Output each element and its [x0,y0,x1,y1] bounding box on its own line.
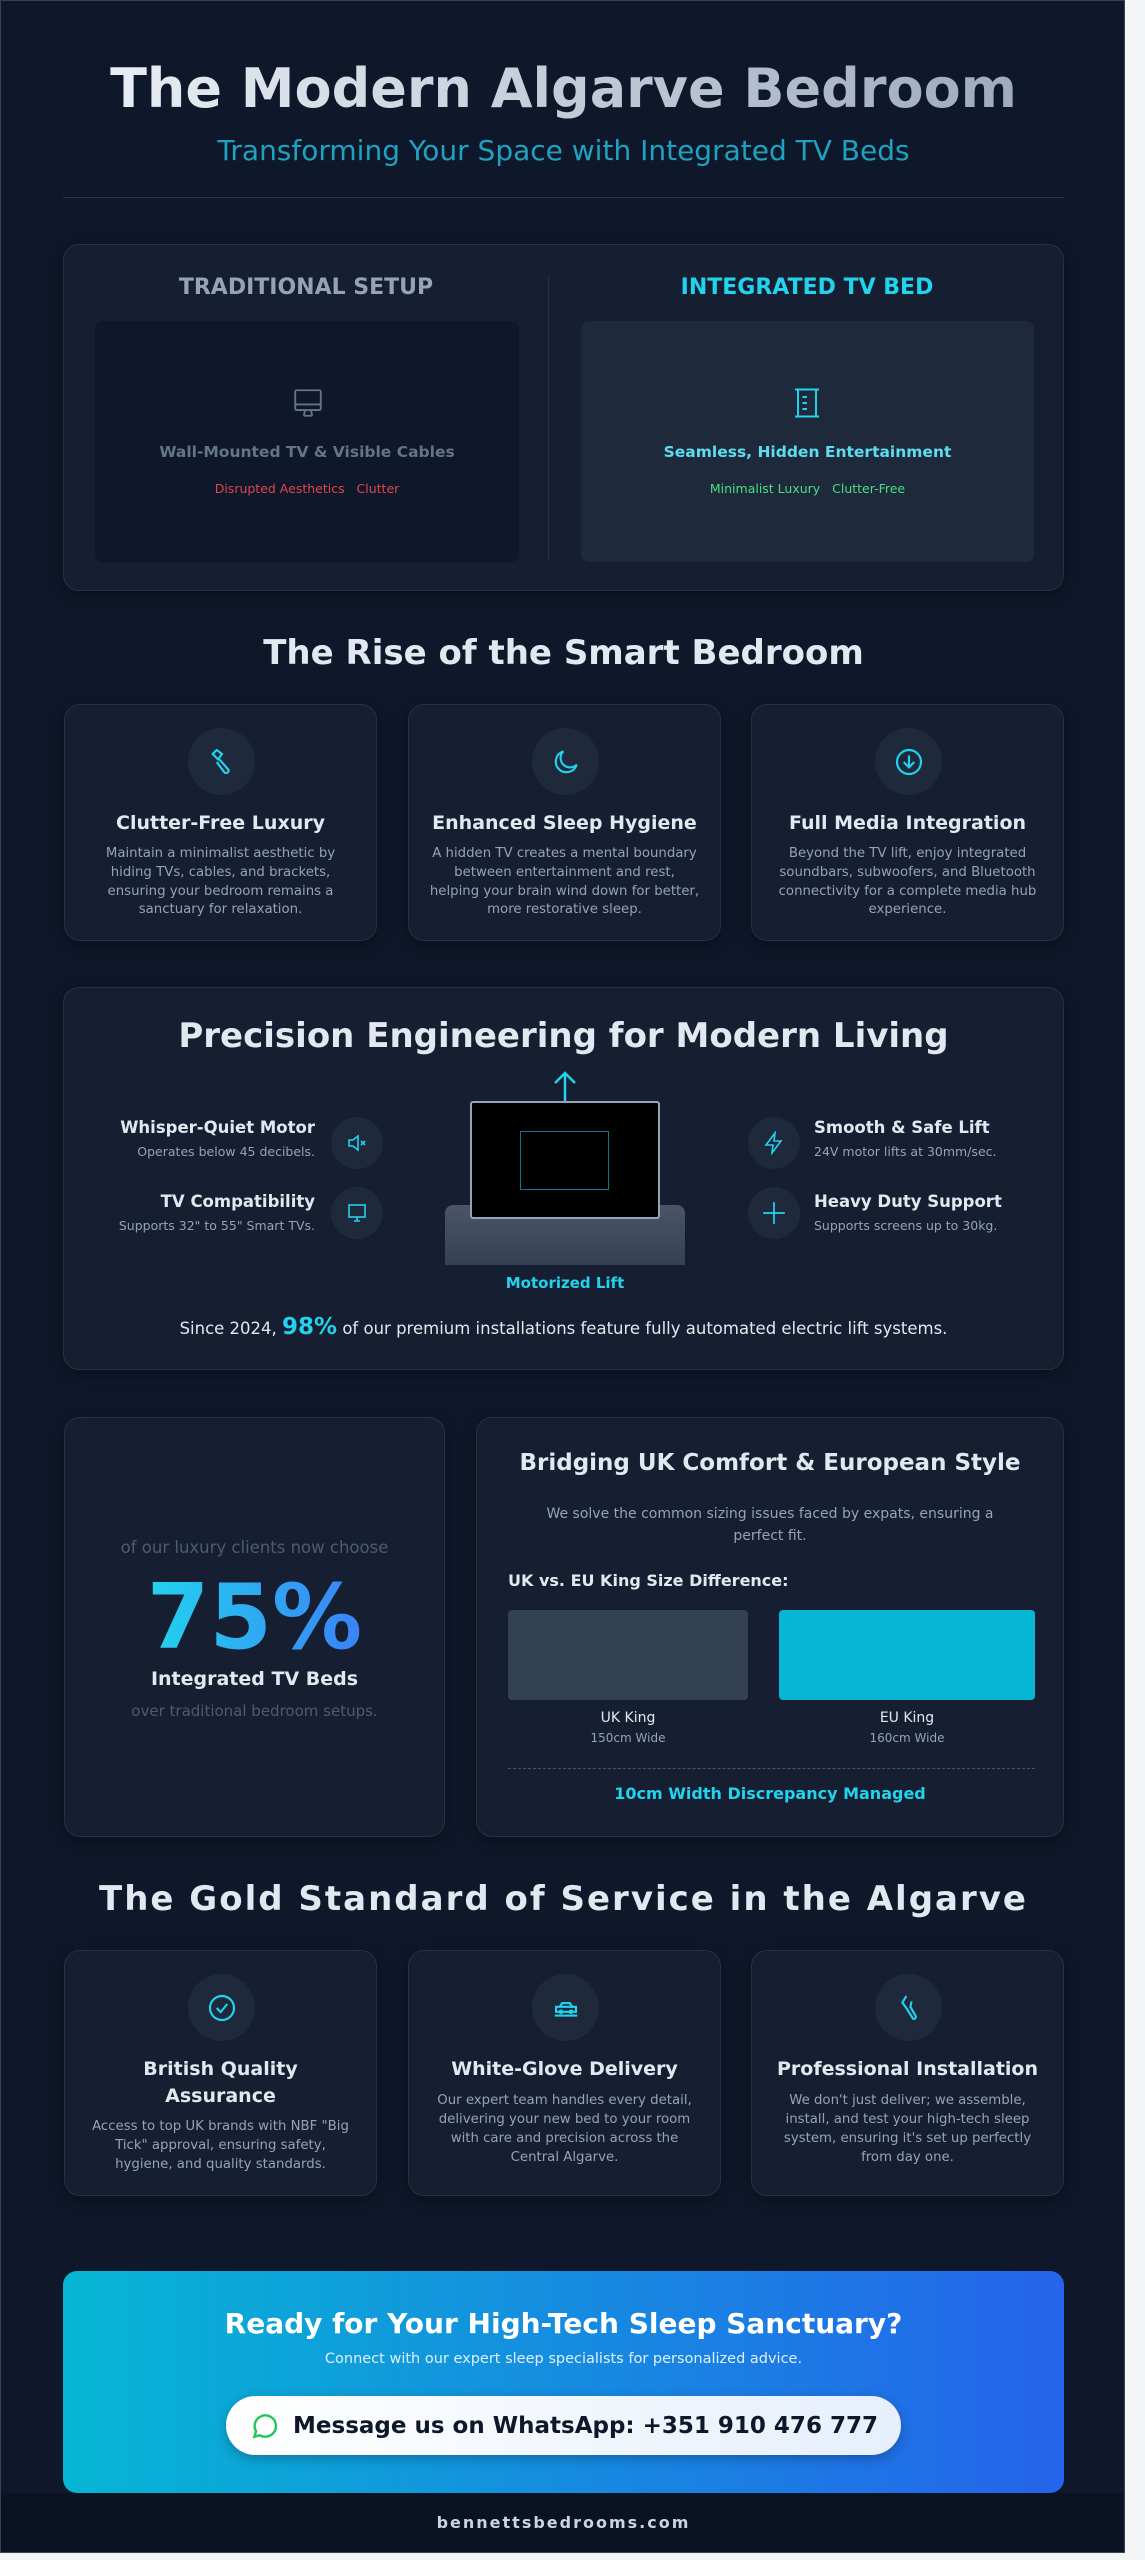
title: Clutter-Free Luxury [116,812,325,834]
arrow: up [554,1071,576,1101]
desc: We don't just deliver; we assemble, install, and test your high-tech sleep system, ensuring it's set up perfectly from day one. [784,2093,1031,2165]
footer [1,2493,1126,2554]
icon: download circle [875,728,942,795]
heading: gold standard: The Gold Standard of Service in the Algarve [99,1879,1028,1919]
card: media integration [751,704,1064,941]
box: integrated [581,321,1034,562]
bar chart: UK King [601,1710,655,1726]
diagram: tv lift [445,1101,685,1265]
feature: smooth lift: Smooth & Safe Lift [814,1118,990,1137]
desc: Tick" approval, ensuring safety, [115,2138,326,2153]
icon: whatsapp [252,2414,278,2438]
stat: 98%: Since 2024, 98% of our premium installations feature fully automated electric lift systems. [180,1314,947,1340]
subtitle: Transforming Your Space with Integrated TV Beds [217,134,910,167]
tags: negatives: Disrupted Aesthetics Clutter [215,481,399,496]
panel: comparison [63,244,1064,591]
feature: tv compatibility: Supports 32" to 55" Smart TVs. [119,1218,315,1233]
card: uk vs eu [476,1417,1064,1837]
chart label: UK vs. EU King Size Difference: [508,1571,789,1590]
heading: Bridging UK Comfort & European Style [519,1450,1020,1476]
bar chart: EU King [880,1710,934,1726]
icon: moon [532,728,599,795]
button: whatsapp: Message us on WhatsApp: +351 910 476 777 [293,2412,878,2438]
feature: heavy duty [748,1187,1002,1239]
feature: whisper-quiet: Operates below 45 decibels. [137,1144,315,1159]
label: Integrated TV Beds [151,1668,358,1690]
desc: Maintain a minimalist aesthetic by hiding TVs, cables, and brackets, ensuring your bedroom remains a sanctuary for relaxation. [106,846,335,917]
feature: tv compatibility [119,1187,383,1239]
cta heading: Ready for Your High-Tech Sleep Sanctuary? [225,2307,902,2340]
feature: whisper-quiet [120,1117,383,1169]
subtext: over traditional bedroom setups. [131,1702,378,1720]
button: whatsapp [226,2396,901,2455]
heading: rise of smart bedroom: The Rise of the Smart Bedroom [263,633,864,673]
card: delivery [408,1950,721,2196]
feature: heavy duty: Heavy Duty Support [814,1192,1002,1211]
feature: whisper-quiet: Whisper-Quiet Motor [120,1118,315,1137]
heading: Precision Engineering for Modern Living [178,1016,949,1056]
heading: traditional setup: TRADITIONAL SETUP [179,275,433,300]
card: sleep hygiene [408,704,721,941]
title: Professional Installation [777,2058,1038,2080]
desc [430,846,699,917]
card: british quality [64,1950,377,2196]
icon: check [188,1974,255,2041]
panel: precision engineering [63,987,1064,1370]
panel: call to action [63,2271,1064,2493]
desc [92,2119,349,2172]
title: Full Media Integration [789,812,1026,834]
description: We solve the common sizing issues faced by expats, ensuring a perfect fit. [546,1506,994,1544]
card: 75% stat [64,1417,445,1837]
icon: bed [795,388,819,418]
icon: wrench [875,1974,942,2041]
desc: Access to top UK brands with NBF "Big [92,2119,349,2134]
card: clutter-free [64,704,377,941]
feature: heavy duty: Supports screens up to 30kg. [814,1218,997,1233]
desc: helping your brain wind down for better, more restorative sleep. [430,884,699,917]
desc: A hidden TV creates a mental boundary between entertainment and rest, [432,846,697,880]
title: White-Glove Delivery [451,2058,678,2080]
card: installation [751,1950,1064,2196]
title: Enhanced Sleep Hygiene [432,812,697,834]
text: wall mounted: Wall-Mounted TV & Visible Cables [159,443,455,461]
label: motorized lift: Motorized Lift [506,1274,624,1292]
heading: integrated tv bed: INTEGRATED TV BED [681,275,933,300]
callout: discrepancy: 10cm Width Discrepancy Managed [614,1784,926,1803]
title: The Modern Algarve Bedroom [110,57,1017,120]
desc: Beyond the TV lift, enjoy integrated soundbars, subwoofers, and Bluetooth connectivity for a complete media hub experience. [779,846,1036,917]
title: British Quality Assurance [143,2058,298,2107]
box: traditional [95,321,519,562]
bar chart: 160cm Wide [870,1731,944,1745]
icon: brush [188,728,255,795]
feature: tv compatibility: TV Compatibility [161,1192,315,1211]
big number: 75% [147,1565,362,1670]
bar chart: 150cm Wide [591,1731,665,1745]
text: intro: of our luxury clients now choose [121,1538,388,1557]
desc: hygiene, and quality standards. [115,2157,326,2172]
text: seamless: Seamless, Hidden Entertainment [664,443,951,461]
feature: smooth lift: 24V motor lifts at 30mm/sec. [814,1144,996,1159]
cta subtext: Connect with our expert sleep specialists for personalized advice. [325,2351,802,2367]
feature: smooth lift [748,1117,996,1169]
footer: bennettsbedrooms.com [437,2513,690,2532]
bar chart [508,1610,1035,1745]
tags: positives: Minimalist Luxury Clutter-Free [710,481,905,496]
icon: van [532,1974,599,2041]
icon: monitor [294,389,322,417]
desc: Our expert team handles every detail, delivering your new bed to your room with care and precision across the Central Algarve. [437,2093,692,2165]
